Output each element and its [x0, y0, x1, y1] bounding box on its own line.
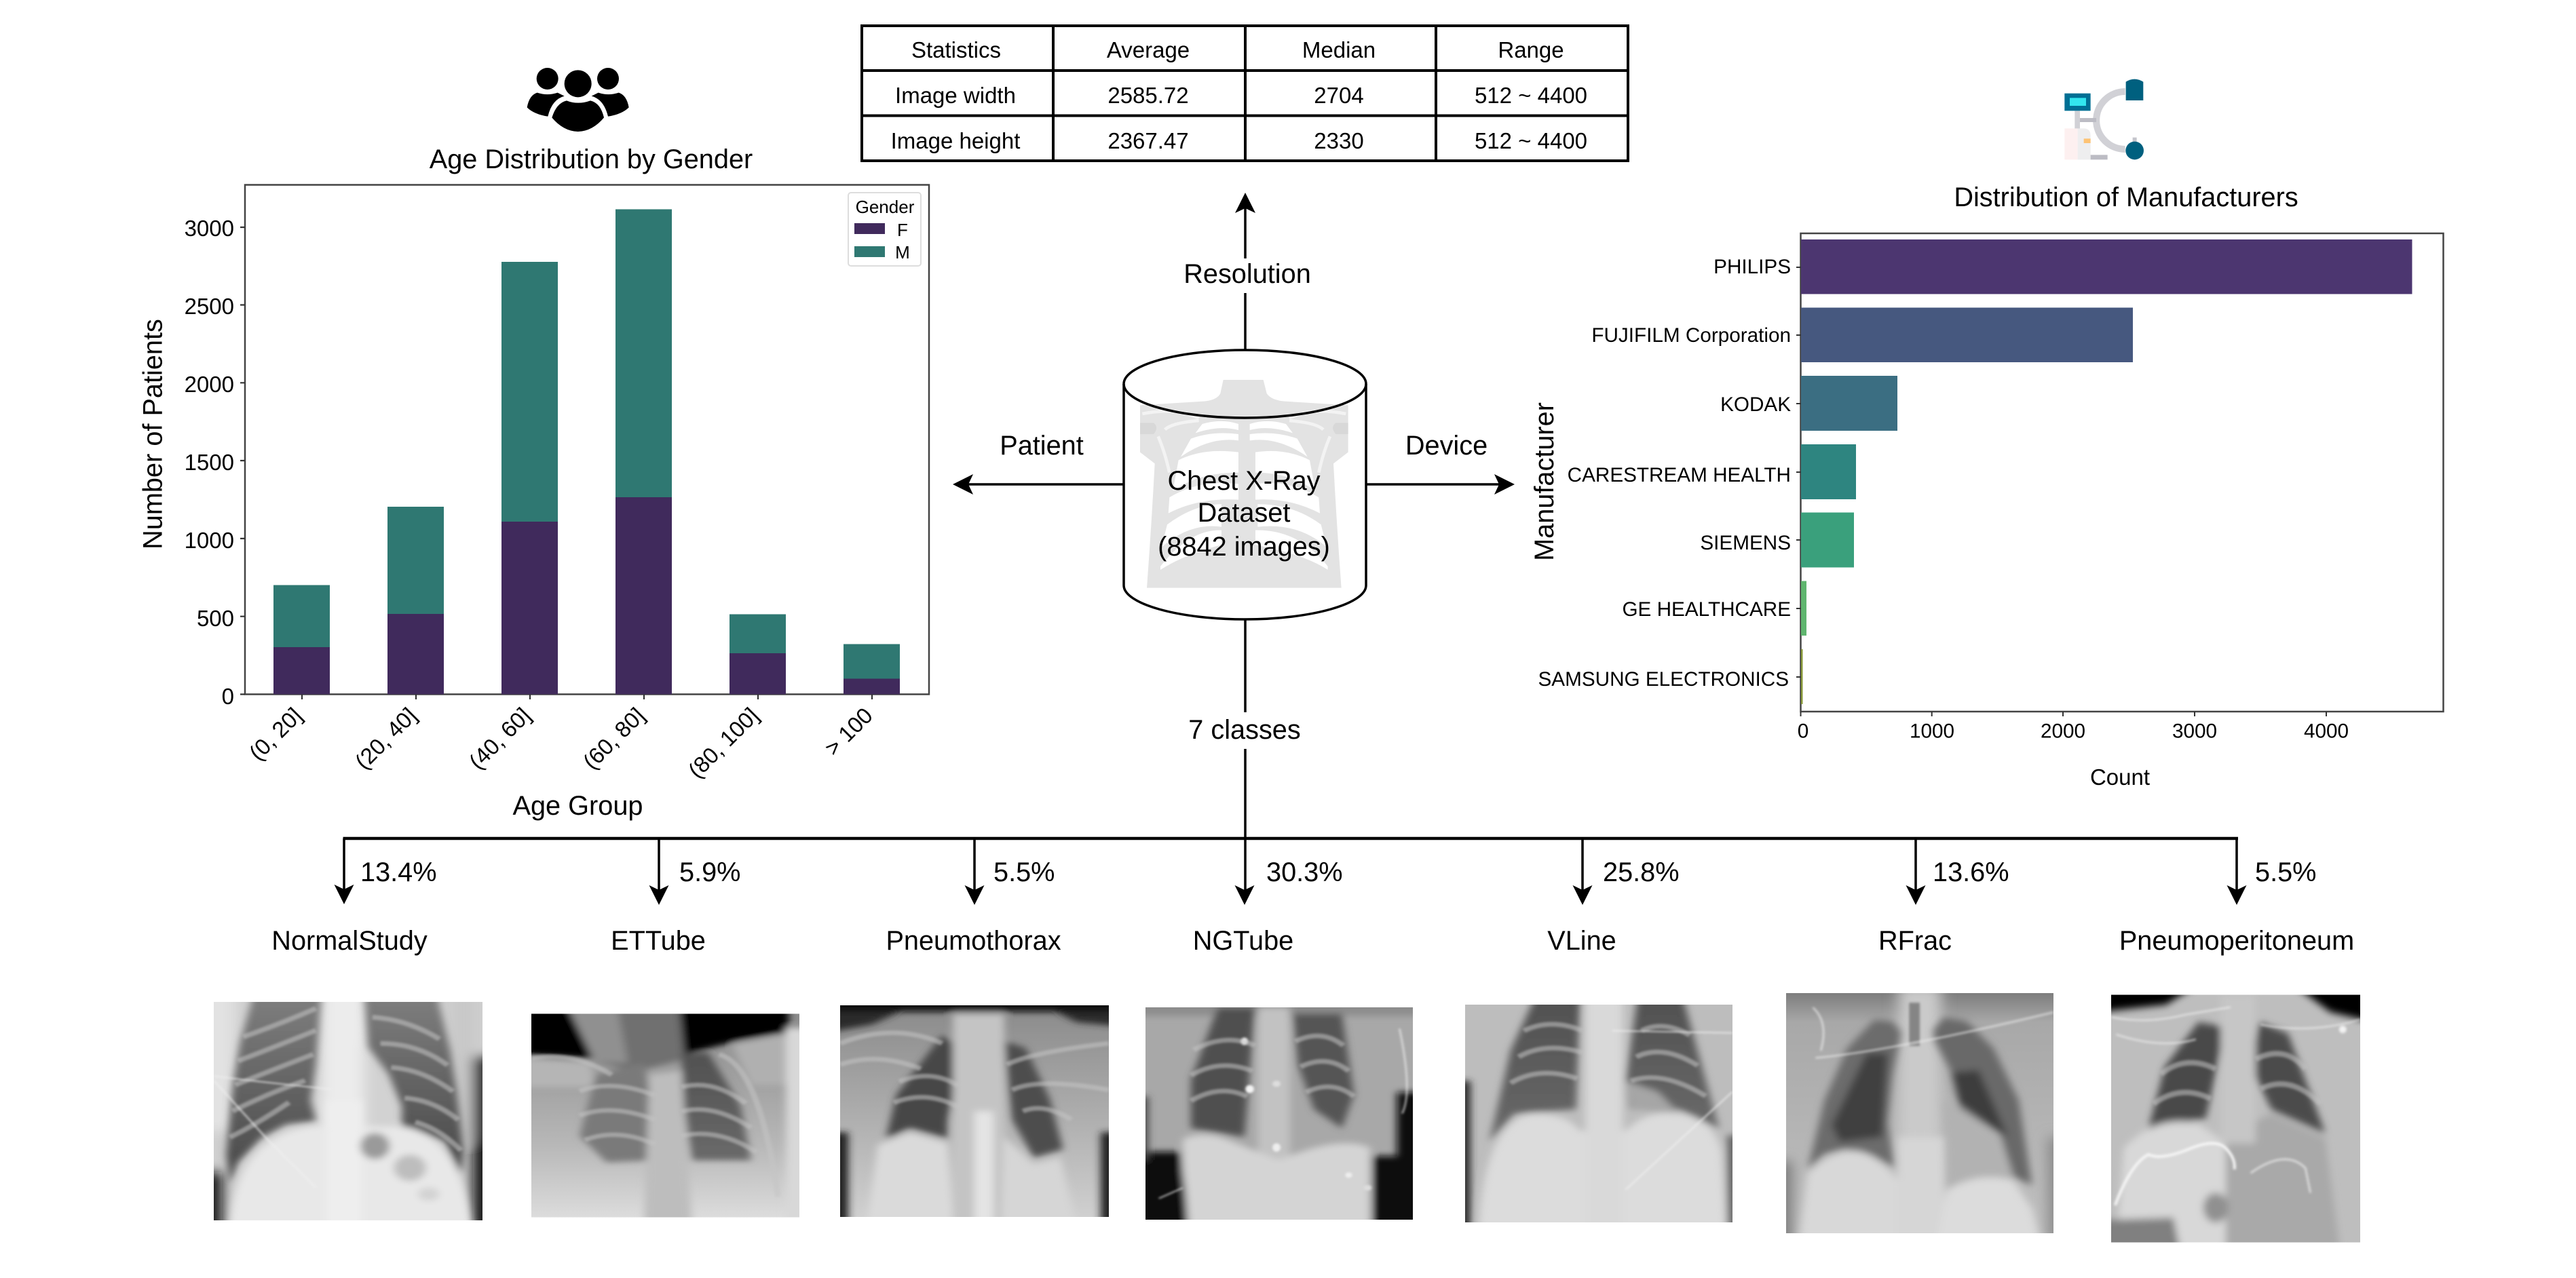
- x-ray: Pneumoperitoneum: [2111, 994, 2360, 1243]
- bar chart: age distribution by gender: [138, 185, 929, 821]
- legend: [848, 193, 921, 266]
- table: resolution statistics: 2330: [1314, 128, 1364, 153]
- manufacturer tick labels: [1538, 256, 2326, 716]
- bars: female: [273, 497, 900, 695]
- arrow: device: [1366, 474, 1515, 495]
- x-ray: RFrac: [1786, 993, 2053, 1233]
- count tick labels: 4000: [2304, 720, 2349, 742]
- x-ray: ETTube: [531, 1013, 799, 1217]
- label: device: Device: [1405, 431, 1488, 461]
- y axis title: Number of Patients: [138, 319, 168, 549]
- icon: x-ray machine: [2064, 79, 2144, 159]
- count tick labels: 1000: [1910, 720, 1954, 742]
- table: resolution statistics: Range: [1498, 37, 1564, 62]
- table: resolution statistics: 512 ~ 4400: [1475, 83, 1587, 108]
- table: resolution statistics: Image height: [891, 128, 1020, 153]
- count tick labels: 3000: [2172, 720, 2217, 742]
- percentages: 13.6%: [1933, 857, 2009, 887]
- manufacturer tick labels: SIEMENS: [1700, 532, 1791, 554]
- x axis tick labels: (20, 40]: [350, 703, 421, 774]
- heading: manufacturers: Distribution of Manufacturers: [1954, 182, 2298, 212]
- x axis tick labels: (60, 80]: [578, 703, 649, 774]
- table: resolution statistics: Median: [1302, 37, 1376, 62]
- manufacturer tick labels: PHILIPS: [1713, 256, 1791, 278]
- y axis ticks and labels: 0: [222, 684, 234, 709]
- arrow: patient: [953, 474, 1124, 495]
- manufacturer tick labels: FUJIFILM Corporation: [1591, 324, 1791, 347]
- arrow: resolution: [1235, 193, 1255, 349]
- legend: F: [897, 220, 908, 240]
- x axis tick labels: [244, 703, 877, 783]
- axis title: count: Count: [2090, 764, 2150, 790]
- percentages: 30.3%: [1266, 857, 1343, 887]
- manufacturer tick labels: SAMSUNG ELECTRONICS: [1538, 668, 1789, 691]
- y axis ticks and labels: 2000: [185, 372, 234, 397]
- y axis ticks and labels: 2500: [185, 294, 234, 319]
- icon: people group: [527, 68, 629, 132]
- manufacturer tick labels: CARESTREAM HEALTH: [1568, 464, 1791, 486]
- percentages: 5.5%: [2255, 857, 2316, 887]
- label: resolution: Resolution: [1183, 259, 1311, 289]
- x-ray: NGTube: [1145, 1007, 1413, 1220]
- label: patient: Patient: [1000, 431, 1084, 461]
- table: resolution statistics: Statistics: [911, 37, 1001, 62]
- y axis ticks and labels: 3000: [185, 216, 234, 241]
- x-ray: Pneumothorax: [840, 1005, 1109, 1217]
- class names: Pneumoperitoneum: [2119, 926, 2354, 956]
- y axis ticks and labels: 1000: [185, 528, 234, 553]
- tree connector: classes: [343, 620, 2238, 890]
- table: resolution statistics: 512 ~ 4400: [1475, 128, 1587, 153]
- percentages: 25.8%: [1603, 857, 1680, 887]
- bars: manufacturer counts: [1801, 239, 2412, 704]
- table: resolution statistics: [862, 26, 1628, 161]
- percentages: 5.5%: [993, 857, 1055, 887]
- x axis tick labels: > 100: [820, 703, 877, 760]
- dataset cylinder: (8842 images): [1158, 532, 1330, 562]
- arrows: class branches: [334, 838, 2246, 905]
- bar chart: manufacturers: [1530, 233, 2443, 790]
- x-ray: NormalStudy: [214, 1002, 482, 1220]
- manufacturer tick labels: KODAK: [1720, 393, 1791, 416]
- dataset cylinder: [1124, 350, 1366, 619]
- x axis tick labels: (40, 60]: [464, 703, 535, 774]
- dataset cylinder: Dataset: [1198, 498, 1290, 528]
- label: 7 classes: 7 classes: [1188, 715, 1301, 745]
- manufacturer tick labels: GE HEALTHCARE: [1622, 598, 1791, 621]
- count tick labels: 0: [1798, 720, 1808, 742]
- table: resolution statistics: 2704: [1314, 83, 1364, 108]
- percentages: [360, 857, 2316, 887]
- percentages: 13.4%: [360, 857, 437, 887]
- icon: chest x-ray silhouette: [1140, 380, 1348, 588]
- table: resolution statistics: Image width: [895, 83, 1016, 108]
- class names: ETTube: [611, 926, 706, 956]
- bars: male: [273, 209, 900, 678]
- y axis ticks and labels: 1500: [185, 450, 234, 475]
- percentages: 5.9%: [679, 857, 740, 887]
- table: resolution statistics: Average: [1107, 37, 1190, 62]
- class names: NormalStudy: [271, 926, 428, 956]
- class names: [271, 926, 2354, 956]
- x axis title: Age Group: [513, 791, 643, 821]
- y axis ticks and labels: [185, 216, 872, 709]
- x axis tick labels: (80, 100]: [683, 703, 763, 783]
- dataset cylinder: Chest X-Ray: [1168, 466, 1321, 496]
- class names: Pneumothorax: [886, 926, 1061, 956]
- table: resolution statistics: 2367.47: [1107, 128, 1189, 153]
- table: resolution statistics: 2585.72: [1107, 83, 1189, 108]
- legend: M: [895, 242, 910, 263]
- x axis tick labels: (0, 20]: [244, 703, 307, 765]
- class names: VLine: [1547, 926, 1616, 956]
- axis title: manufacturer: Manufacturer: [1530, 402, 1559, 561]
- heading: age distribution: Age Distribution by Gender: [430, 144, 753, 174]
- x-ray: VLine: [1465, 1005, 1732, 1222]
- count tick labels: [1798, 720, 2349, 742]
- class names: RFrac: [1878, 926, 1952, 956]
- count tick labels: 2000: [2041, 720, 2085, 742]
- class names: NGTube: [1193, 926, 1293, 956]
- y axis ticks and labels: 500: [197, 606, 234, 631]
- legend: Gender: [856, 197, 915, 217]
